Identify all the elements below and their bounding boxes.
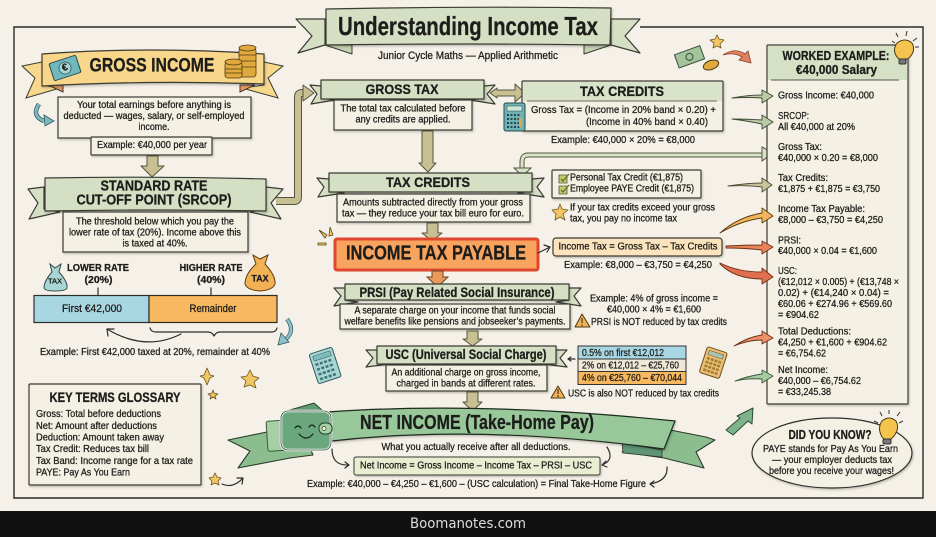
credit list: Personal Tax Credit (€1,875) — [570, 172, 683, 184]
glossary terms: Net: Amount after deductions — [36, 420, 157, 432]
glossary terms: PAYE: Pay As You Earn — [36, 466, 130, 478]
arrow: gross tax to tax credits — [419, 131, 436, 172]
arrow: payable to prsi — [427, 271, 448, 287]
rate example: Example: First €42,000 taxed at 20%, remainder at 40% — [40, 347, 270, 358]
worked steps: Income Tax Payable: — [778, 203, 865, 215]
arrows: into worked example — [720, 90, 773, 383]
gross tax banner: GROSS TAX — [366, 81, 439, 97]
usc warning: USC is also NOT reduced by tax credits — [568, 388, 719, 400]
worked steps: 0.02) + (€14,240 × 0.04) = — [778, 287, 889, 299]
srcop banner: CUT-OFF POINT (SRCOP) — [76, 192, 232, 208]
example box: Example: €40,000 per year — [97, 140, 208, 151]
worked steps: €8,000 – €3,750 = €4,250 — [778, 214, 883, 226]
icon: wallet — [266, 403, 332, 451]
income tax formula — [553, 238, 722, 256]
srcop description: is taxed at 40%. — [122, 238, 188, 250]
rate bar — [34, 296, 277, 322]
footer bar: Boomanotes.com — [410, 516, 526, 532]
panel: net income — [228, 403, 715, 490]
income tax example: Example: €8,000 – €3,750 = €4,250 — [564, 259, 712, 271]
gross tax description: The total tax calculated before — [340, 104, 466, 114]
worked steps: Total Deductions: — [778, 326, 851, 338]
brace — [150, 328, 277, 336]
glossary terms: Gross: Total before deductions — [36, 408, 161, 420]
formula example: Example: €40,000 × 20% = €8,000 — [551, 134, 695, 146]
panel: glossary — [29, 384, 201, 485]
formula text — [531, 104, 716, 128]
worked steps: (€12,012 × 0.005) + (€13,748 × — [778, 276, 899, 288]
worked steps: Tax Credits: — [778, 172, 828, 184]
arrow: prsi to usc — [463, 331, 482, 346]
callout: did you know: DID YOU KNOW? — [788, 428, 872, 442]
gross income description: deducted — wages, salary, or self-employed — [64, 111, 244, 122]
arrow: net income — [735, 370, 773, 383]
formula text: (Income in 40% band × 0.40) — [586, 116, 708, 128]
tax credits banner: TAX CREDITS — [386, 174, 470, 190]
income tax payable: INCOME TAX PAYABLE — [346, 242, 526, 264]
worked steps: USC: — [778, 265, 797, 277]
icon: banknote: € — [61, 62, 70, 74]
icon: orange tax bag — [245, 255, 275, 291]
income tax formula: Income Tax = Gross Tax – Tax Credits — [558, 240, 718, 252]
panel: gross tax formula — [522, 81, 723, 131]
srcop description: The threshold below which you pay the — [76, 216, 234, 228]
worked steps: €40,000 – €6,754.62 — [778, 375, 861, 387]
lower rate label: LOWER RATE — [67, 262, 129, 274]
higher rate label — [180, 262, 242, 286]
prsi example: €40,000 × 4% = €1,600 — [607, 304, 701, 316]
worked steps: €40,000 × 0.04 = €1,600 — [778, 245, 877, 257]
net income description: What you actually receive after all deductions. — [382, 441, 570, 453]
gross tax banner — [310, 80, 495, 104]
worked steps: = €33,245.38 — [778, 386, 831, 398]
worked example heading — [782, 49, 890, 77]
usc banner: USC (Universal Social Charge) — [386, 346, 546, 362]
small arrow — [568, 357, 575, 361]
title banner: Understanding Income Tax — [338, 11, 598, 41]
credit note: tax, you pay no income tax — [570, 214, 677, 224]
arrow: gross tax to formula — [490, 84, 525, 102]
prsi example — [590, 292, 718, 316]
net income example: Example: €40,000 – €4,250 – €1,600 – (USC calculation) = Final Take-Home Figure — [307, 478, 646, 490]
panel: tax rate bands — [34, 255, 291, 358]
footer bar — [0, 511, 936, 537]
usc description — [386, 365, 547, 391]
small arrow — [538, 245, 550, 253]
arrow: gross income to srcop — [141, 156, 164, 177]
arrow: usc — [720, 263, 773, 284]
srcop banner: STANDARD RATE — [100, 178, 208, 194]
glossary terms: Deduction: Amount taken away — [36, 432, 165, 444]
srcop description — [63, 212, 248, 252]
icon: teal tax bag — [44, 264, 67, 291]
higher rate label: (40%) — [197, 274, 225, 286]
icon: bulb — [874, 410, 903, 444]
net income formula — [354, 457, 600, 475]
arrow: decorative red — [723, 51, 751, 63]
worked steps: Gross Income: €40,000 — [778, 90, 874, 102]
rate bar: First €42,000 — [62, 303, 122, 315]
prsi description: welfare benefits like pensions and jobseeker’s payments. — [344, 316, 566, 328]
arrow: tax credits — [728, 178, 772, 192]
icon: tan calculator — [699, 347, 727, 379]
worked steps: €40,000 × 0.20 = €8,000 — [778, 152, 878, 164]
panel: prsi — [334, 284, 581, 329]
usc banner — [366, 346, 567, 367]
example box — [91, 137, 212, 155]
prsi example: Example: 4% of gross income = — [590, 292, 718, 304]
arrow: green up — [726, 408, 753, 435]
glossary terms — [36, 408, 193, 478]
icon: teal curved arrow — [36, 104, 54, 126]
arrow: gross income — [732, 90, 773, 103]
higher rate label: HIGHER RATE — [180, 262, 242, 274]
tax credits description: Amounts subtracted directly from your gross — [343, 198, 523, 208]
curved arrows — [332, 447, 667, 487]
credit note — [552, 202, 715, 224]
rate bar: Remainder — [190, 303, 237, 315]
alert marks — [318, 227, 333, 245]
income tax payable — [335, 239, 538, 270]
gross income banner — [22, 50, 283, 98]
panel: gross tax — [310, 80, 495, 130]
arrow: income tax — [720, 208, 773, 233]
net income formula: Net Income = Gross Income – Income Tax – PRSI – USC — [360, 460, 592, 472]
worked steps: All €40,000 at 20% — [778, 121, 855, 133]
arrow: tax credits to payable — [422, 223, 442, 241]
worked steps: = €6,754.62 — [778, 348, 826, 360]
panel: worked example — [767, 45, 908, 404]
teal arrow — [278, 319, 291, 345]
icon: star — [710, 35, 724, 48]
gross tax description: any credits are applied. — [356, 114, 450, 126]
arrow: prsi — [726, 241, 773, 254]
panel: gross income — [22, 45, 283, 155]
usc rate table: 2% on €12,012 – €25,760 — [582, 360, 679, 372]
glossary terms: Tax Band: Income range for a tax rate — [36, 455, 193, 467]
curved arrow — [107, 329, 181, 342]
title banner — [296, 7, 640, 54]
icon: bill and coin — [674, 46, 720, 72]
worked example heading: €40,000 Salary — [796, 63, 877, 77]
worked steps: SRCOP: — [778, 110, 809, 122]
tax credits banner — [317, 173, 544, 197]
decorative stars — [200, 368, 259, 486]
worked steps: Net Income: — [778, 364, 828, 376]
prsi warning: PRSI is NOT reduced by tax credits — [591, 316, 727, 328]
arrow: worked example to tax credits — [514, 147, 773, 176]
prsi description: A separate charge on your income that funds social — [354, 306, 556, 316]
icon: bulb top — [892, 31, 919, 64]
credit list — [552, 170, 701, 198]
icon: teal tax bag: TAX — [48, 276, 62, 286]
credit list: Employee PAYE Credit (€1,875) — [570, 184, 694, 194]
formula heading: TAX CREDITS — [580, 83, 664, 99]
net income ribbon: NET INCOME (Take-Home Pay) — [360, 412, 594, 434]
worked steps: €4,250 + €1,600 + €904.62 — [778, 336, 887, 348]
gross income description — [58, 97, 251, 138]
lower rate label — [67, 262, 129, 286]
gross income description: income. — [138, 122, 170, 133]
arrow: usc to net income — [463, 392, 482, 411]
tax credits description — [337, 194, 530, 222]
icon: coins — [225, 45, 256, 78]
worked steps — [778, 90, 899, 398]
gross income description: Your total earnings before anything is — [77, 100, 231, 111]
arrow: srcop — [732, 115, 773, 129]
worked steps: Gross Tax: — [778, 141, 822, 153]
callout: did you know: PAYE stands for Pay As You Earn — [763, 443, 898, 455]
icons: check marks — [559, 175, 567, 194]
icon: calculator — [504, 103, 525, 131]
callout: did you know: — your employer deducts tax — [772, 454, 893, 466]
srcop banner — [28, 177, 283, 219]
usc rate table — [578, 346, 686, 384]
icon: banknote — [49, 55, 81, 81]
panel: usc — [366, 346, 567, 391]
worked steps: PRSI: — [778, 234, 801, 246]
worked steps: = €904.62 — [778, 309, 819, 321]
usc description: charged in bands at different rates. — [396, 378, 536, 390]
net income ribbon — [228, 408, 715, 468]
usc warning — [551, 386, 719, 400]
icon: teal calculator — [309, 347, 341, 384]
arrow: srcop to gross tax — [276, 85, 314, 201]
worked example heading: WORKED EXAMPLE: — [782, 49, 890, 63]
gross income banner: GROSS INCOME — [90, 56, 214, 76]
panel: srcop — [28, 177, 283, 252]
arrow: total deductions — [734, 331, 773, 346]
usc rate table: 0.5% on first €12,012 — [582, 347, 664, 359]
formula text: Gross Tax = (Income in 20% band × 0.20) + — [531, 104, 716, 116]
callout: did you know: before you receive your wages! — [769, 465, 894, 477]
credit note: If your tax credits exceed your gross — [570, 202, 715, 214]
tax credits description: tax — they reduce your tax bill euro for euro. — [342, 208, 524, 220]
gross tax description — [334, 100, 472, 130]
glossary heading: KEY TERMS GLOSSARY — [50, 389, 181, 405]
prsi banner: PRSI (Pay Related Social Insurance) — [360, 284, 554, 300]
glossary terms: Tax Credit: Reduces tax bill — [36, 443, 149, 455]
panel: tax credits — [317, 173, 544, 222]
srcop description: lower rate of tax (20%). Income above this — [69, 228, 241, 238]
subtitle: Junior Cycle Maths — Applied Arithmetic — [378, 50, 558, 62]
prsi warning — [575, 314, 727, 328]
prsi description — [340, 304, 570, 329]
lower rate label: (20%) — [84, 274, 112, 286]
prsi banner — [334, 284, 581, 306]
worked steps: €1,875 + €1,875 = €3,750 — [778, 183, 880, 195]
callout: did you know — [752, 410, 912, 488]
usc rate table: 4% on €25,760 – €70,044 — [582, 372, 682, 384]
usc description: An additional charge on gross income, — [392, 368, 540, 378]
worked steps: €60.06 + €274.96 + €569.60 — [778, 298, 892, 310]
icon: orange tax bag: TAX — [252, 274, 269, 284]
